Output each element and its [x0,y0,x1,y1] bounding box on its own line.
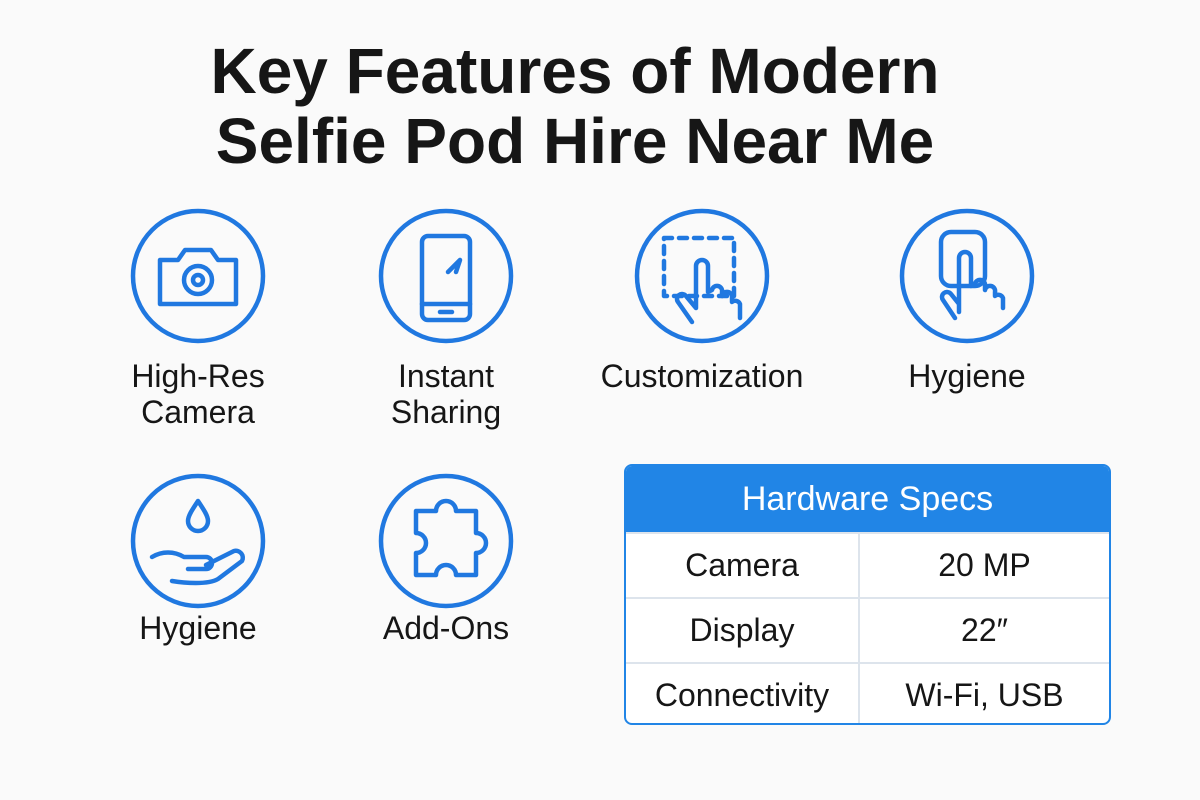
title [210,35,940,177]
label: Instant Sharing [391,358,501,430]
table header [626,466,1109,532]
row: connectivity [626,662,1109,727]
row: connectivity: Wi-Fi, USB [905,677,1064,713]
row: connectivity: Connectivity [655,677,829,713]
row: display: Display [690,612,794,648]
icon: customization [634,208,770,344]
icon: hand with drop [130,474,266,608]
label: Customization: Customization [601,358,803,394]
row: display: 22″ [961,612,1008,648]
label: Instant Sharing: Instant [398,358,494,394]
table: hardware specs [624,464,1111,725]
row: camera: Camera [685,547,799,583]
label: High-Res Camera: High-Res [131,358,265,394]
label: Add-Ons: Add-Ons [383,610,509,646]
icon: phone [378,208,514,344]
icon: puzzle [378,474,514,608]
row: camera: 20 MP [938,547,1031,583]
icon: touch [900,208,1034,344]
row: camera [626,532,1109,597]
title: Key Features of Modern [210,35,940,107]
label: Hygiene: Hygiene [908,358,1026,394]
title: Selfie Pod Hire Near Me [216,105,934,177]
icon: camera [130,208,266,344]
label: Hygiene 2: Hygiene [139,610,257,646]
label: Instant Sharing: Sharing [391,394,501,430]
table header: Hardware Specs [742,480,993,518]
label: High-Res Camera [131,358,265,430]
row: display [626,597,1109,662]
label: High-Res Camera: Camera [141,394,255,430]
